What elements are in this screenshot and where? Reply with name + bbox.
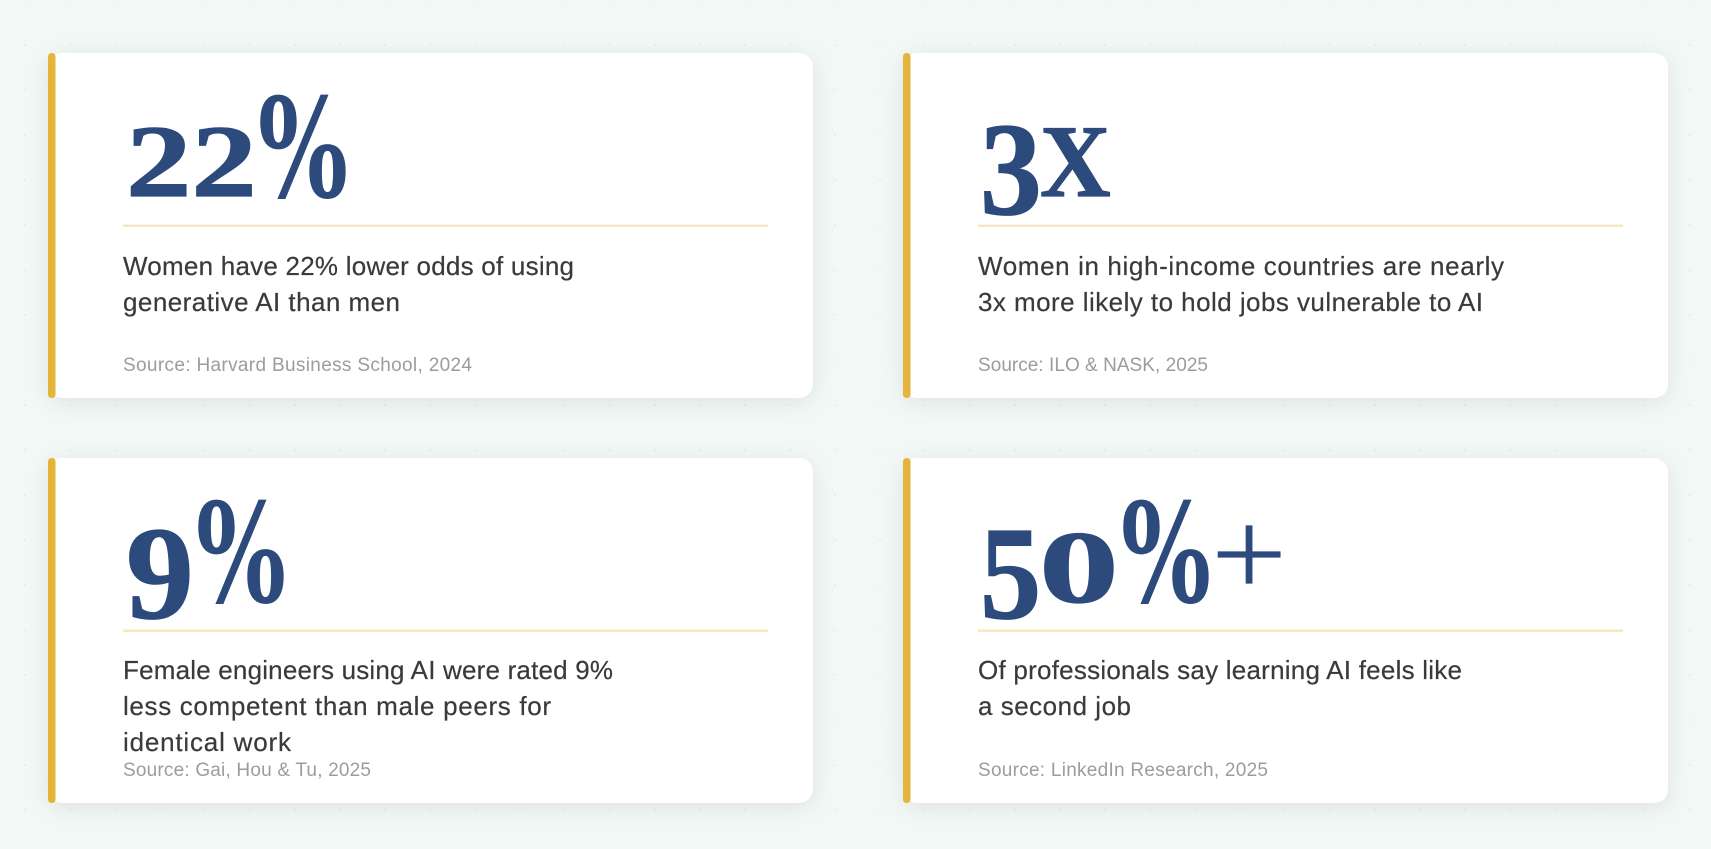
source: Source: Gai, Hou & Tu, 2025 [123,760,371,781]
description: Female engineers using AI were rated 9% [123,655,613,685]
big number: 50%+: + [1211,486,1287,624]
panel: 22% card [48,53,813,398]
description: Women have 22% lower odds of using [123,251,574,281]
description: a second job [978,691,1131,721]
panel: 9% card [48,458,813,803]
accent bar [48,458,56,803]
accent bar [903,53,910,398]
big number: 50%+: 5 [980,499,1041,647]
source: Source: LinkedIn Research, 2025 [978,760,1268,781]
accent bar [903,458,910,803]
panel: 50%+ card [903,458,1668,803]
big number: 50%+: 0 [1039,511,1119,625]
big number: 50%+: % [1121,473,1211,635]
big number: 22%: % [258,68,348,230]
big number: 9%: 9 [126,500,194,648]
description: Women in high-income countries are nearly [978,251,1504,281]
big number: 3X: 3 [980,96,1042,243]
description: Of professionals say learning AI feels like [978,655,1462,685]
big number: 3X: X [1040,104,1111,219]
description: identical work [123,727,292,757]
big number: 3X [980,96,1111,243]
description: less competent than male peers for [123,691,551,721]
panel: 3X card [903,53,1668,398]
source: Source: Harvard Business School, 2024 [123,355,472,376]
big number: 50%+ [980,473,1287,647]
big number: 9%: % [196,473,286,635]
source: Source: ILO & NASK, 2025 [978,355,1208,376]
big number: 9% [126,473,286,648]
accent bar [48,53,56,398]
big number: 22%: 22 [126,105,257,219]
description: generative AI than men [123,287,400,317]
description: 3x more likely to hold jobs vulnerable to AI [978,287,1483,317]
big number: 22% [126,68,348,230]
